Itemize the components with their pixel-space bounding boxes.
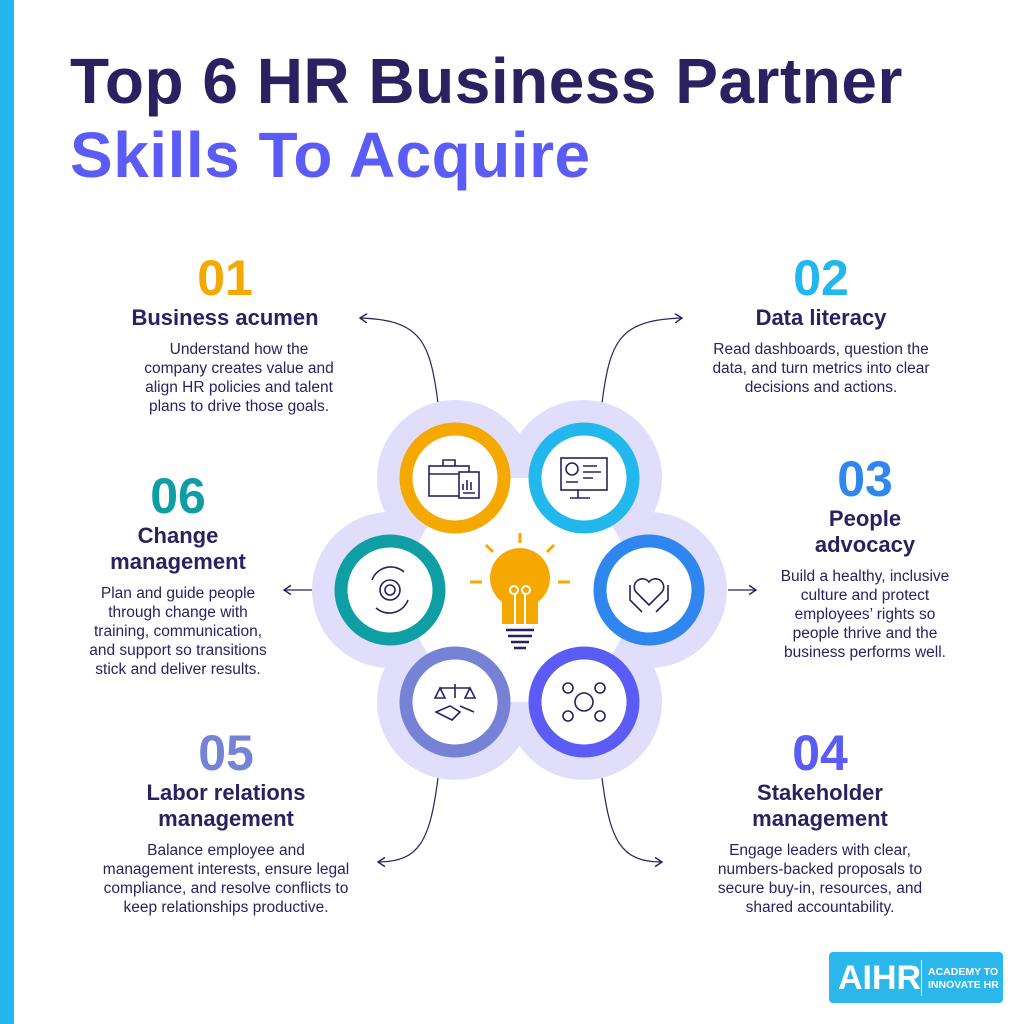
item 03 — [781, 451, 949, 661]
item 05: management interests, ensure legal — [103, 861, 349, 878]
logo — [829, 952, 1003, 1003]
logo: INNOVATE HR — [928, 979, 999, 991]
item 06 — [89, 468, 267, 678]
item 02: 02 — [793, 250, 849, 306]
logo: ACADEMY TO — [928, 966, 998, 978]
item 03: business performs well. — [784, 644, 946, 661]
item 01: 01 — [197, 250, 253, 306]
item 04: management — [752, 806, 888, 831]
item 05: compliance, and resolve conflicts to — [104, 880, 348, 897]
item 05 — [103, 725, 349, 916]
item 04: 04 — [792, 725, 848, 781]
item 01: plans to drive those goals. — [149, 398, 329, 415]
item 04: Stakeholder — [757, 780, 883, 805]
item 06: 06 — [150, 468, 206, 524]
connectors — [284, 318, 756, 862]
icons — [372, 458, 668, 721]
title: Top 6 HR Business Partner — [70, 45, 903, 117]
item 01: Business acumen — [131, 305, 319, 330]
item 03: People — [829, 506, 901, 531]
item 03: 03 — [837, 451, 893, 507]
item 03: employees’ rights so — [795, 606, 935, 623]
item 04: Engage leaders with clear, — [729, 842, 911, 859]
item 04: secure buy-in, resources, and — [718, 880, 922, 897]
item 01: company creates value and — [144, 360, 334, 377]
title: Skills To Acquire — [70, 119, 591, 191]
item 04 — [718, 725, 922, 916]
item 05: management — [158, 806, 294, 831]
lavender halo — [312, 400, 727, 780]
item 06: training, communication, — [94, 623, 262, 640]
title — [70, 45, 903, 191]
item 02 — [712, 250, 930, 396]
item 05: Balance employee and — [147, 842, 305, 859]
item 01: Understand how the — [170, 341, 308, 358]
item 04: numbers-backed proposals to — [718, 861, 922, 878]
item 04: shared accountability. — [746, 899, 894, 916]
item 03: people thrive and the — [793, 625, 937, 642]
item 02: Data literacy — [756, 305, 886, 330]
item 06: Plan and guide people — [101, 585, 255, 602]
left stripe — [0, 0, 14, 1024]
item 06: management — [110, 549, 246, 574]
item 02: Read dashboards, question the — [713, 341, 929, 358]
item 06: Change — [138, 523, 218, 548]
logo: AIHR — [838, 959, 921, 997]
circles — [341, 429, 698, 751]
item 05: Labor relations — [147, 780, 305, 805]
item 05: 05 — [198, 725, 254, 781]
item 03: advocacy — [815, 532, 915, 557]
bulb — [470, 533, 570, 648]
item 05: keep relationships productive. — [123, 899, 329, 916]
item 02: data, and turn metrics into clear — [712, 360, 930, 377]
item 06: through change with — [108, 604, 248, 621]
item 03: culture and protect — [801, 587, 929, 604]
item 03: Build a healthy, inclusive — [781, 568, 949, 585]
item 02: decisions and actions. — [745, 379, 897, 396]
item 01 — [131, 250, 334, 415]
item 01: align HR policies and talent — [145, 379, 333, 396]
item 06: and support so transitions — [89, 642, 267, 659]
item 06: stick and deliver results. — [95, 661, 261, 678]
